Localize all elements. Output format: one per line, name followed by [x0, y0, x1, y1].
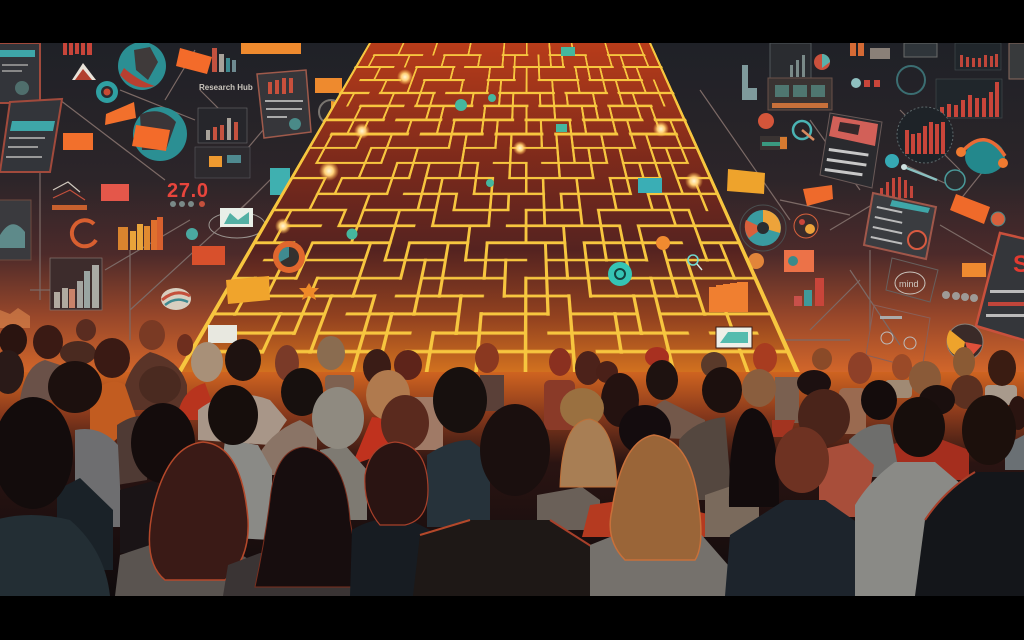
icon: ring dial — [897, 66, 925, 94]
bar chart: small mixed — [212, 48, 236, 72]
chart: pie small — [794, 214, 818, 238]
icon: L block — [742, 65, 757, 100]
small dots — [170, 201, 205, 207]
panel: sales board — [976, 233, 1024, 342]
icon: ring gauge — [72, 220, 96, 246]
person: long brown hair — [115, 442, 250, 596]
maze floor — [176, 43, 800, 378]
panel: edge report — [1009, 43, 1024, 79]
teal card — [638, 178, 662, 193]
person: dark hair short — [350, 442, 430, 596]
icon: teal gauge — [793, 121, 814, 140]
small bars — [850, 43, 864, 56]
chart panel: grey rising bars — [50, 258, 102, 310]
note: orange small — [803, 185, 833, 206]
chart: bottom pie — [947, 324, 983, 360]
panel: document note — [820, 113, 882, 188]
icon: striped sphere — [161, 288, 191, 310]
note: orange card two — [105, 102, 136, 125]
crowd shadow base — [0, 372, 1024, 600]
person: centre front — [413, 404, 612, 596]
maze lines — [178, 43, 800, 372]
chart panel: column chart — [198, 108, 247, 143]
sketch: scribble label — [886, 258, 938, 302]
bar chart: red triangle — [880, 177, 913, 198]
bar chart: large right — [936, 79, 1002, 118]
icon: magnifier — [688, 255, 702, 270]
note: orange card — [176, 48, 212, 74]
icon: donut — [319, 100, 343, 124]
icon: mountain — [72, 63, 96, 80]
chart: pie large — [740, 205, 786, 251]
sketch: scribble label: mind — [899, 279, 919, 289]
note: top orange bar — [241, 43, 301, 54]
icon: yellow envelope — [226, 276, 270, 304]
icon: small white screen — [208, 325, 237, 343]
note: red tag — [101, 184, 129, 201]
heading: research label: Research Hub — [199, 83, 253, 92]
bar chart: top right — [955, 43, 1001, 70]
glowing nodes — [275, 69, 703, 234]
note: orange strip — [962, 263, 986, 277]
line chart: mountain — [52, 182, 87, 210]
decorative skyline glow — [0, 308, 30, 328]
small panel — [904, 43, 937, 57]
maze icons — [208, 47, 752, 348]
icon: monitor — [716, 327, 752, 348]
connector lines — [30, 50, 1000, 345]
panel: outline panel — [866, 305, 930, 370]
icon: orange ball — [758, 113, 774, 129]
icon: maze bars — [709, 282, 748, 312]
person: far left front — [0, 397, 110, 596]
icon: teal dot with link — [885, 154, 937, 180]
note: orange card three — [63, 133, 93, 150]
panel: left line chart — [0, 200, 31, 260]
crowd: third row — [48, 361, 874, 570]
crowd — [0, 319, 1024, 600]
icon: teal card — [270, 168, 290, 195]
maze verticals — [201, 43, 775, 378]
icon: teal gauge — [608, 262, 632, 286]
icon: teal dot — [186, 228, 198, 240]
dashboard tile — [195, 147, 250, 178]
maze outer edges — [176, 43, 800, 378]
panel: dashboard report — [0, 99, 62, 172]
bar chart: top red bars — [63, 43, 92, 55]
dashboard tile — [768, 78, 832, 110]
person: grey shirt — [855, 397, 962, 596]
person: bald in suit — [725, 427, 879, 596]
middle maze horizontals — [254, 148, 739, 243]
wall background — [0, 43, 1024, 383]
note: yellow envelope — [727, 169, 765, 194]
right panels — [727, 43, 1024, 370]
person: dark shirt right — [915, 395, 1024, 596]
icon: star — [299, 283, 319, 300]
bar chart: small colored — [794, 278, 824, 306]
icon: globe two with note — [132, 107, 187, 161]
stat: 27.0: 27.0 — [167, 180, 208, 202]
teal markers — [346, 47, 575, 240]
panel: tilted report with bars — [257, 70, 311, 138]
crowd: back row — [0, 319, 1017, 450]
bar chart: orange bars — [118, 217, 163, 250]
icon: pie small — [814, 54, 830, 70]
note: red orange tile — [192, 246, 225, 265]
icon: orange balloon — [656, 236, 670, 250]
person: dark hair centre left — [223, 447, 392, 596]
icon: teal orb with orange arc — [956, 140, 1008, 174]
icon: laptop screen with orbit — [209, 208, 265, 238]
icons: grey dot row — [942, 291, 978, 302]
left panels — [0, 42, 343, 328]
icon: ring — [991, 212, 1005, 226]
panel: top tablet — [770, 43, 811, 78]
icon: red emblem — [945, 170, 965, 190]
person: long blonde hair — [590, 435, 732, 596]
note: orange tile — [950, 194, 990, 224]
tile: salmon — [784, 250, 814, 272]
icons: three dots — [851, 78, 880, 88]
icon: orange badge — [748, 253, 764, 269]
note: tag — [315, 78, 342, 93]
icon: teal ring — [96, 81, 118, 103]
upper maze horizontals — [317, 55, 691, 134]
panel: top left report — [0, 43, 40, 103]
panel: tilted report — [864, 193, 936, 259]
crowd: second row — [90, 338, 1024, 500]
icon: globe one — [118, 42, 166, 90]
small card — [870, 48, 890, 59]
icon: donut on left — [273, 241, 305, 273]
bar chart: circular bars — [897, 107, 953, 163]
small dashboard — [760, 136, 787, 150]
lower maze horizontals — [191, 260, 788, 352]
